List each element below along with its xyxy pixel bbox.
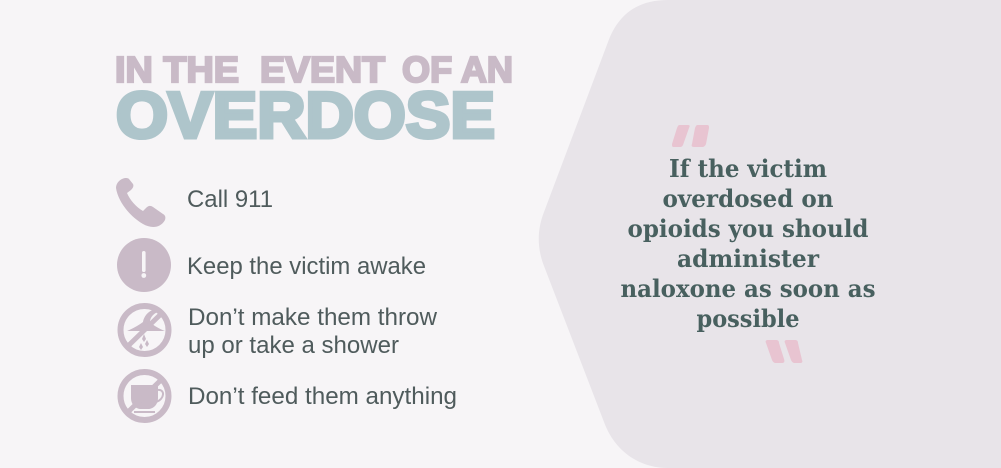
title [115,49,513,152]
heading: in the event of an: OF AN [402,49,513,90]
text block: quote: If the victim [669,154,827,183]
text block: quote: possible [696,304,800,333]
text block: steps: Don’t make them throw [188,304,438,331]
text block: steps [187,186,457,410]
text block: quote: opioids you should [628,214,869,243]
text block: quote [620,154,876,333]
text block: steps: Call 911 [187,186,273,213]
heading: in the event of an [115,49,513,90]
text block: quote: administer [677,244,819,273]
text block: quote: overdosed on [662,184,834,213]
heading: in the event of an: EVENT [260,49,385,90]
icon: no shower [120,306,168,354]
heading: overdose: OVERDOSE [116,78,495,152]
icon: phone [116,178,165,227]
text block: steps: Keep the victim awake [187,253,426,280]
icon: no food or drink [120,372,168,420]
icon: opening quote mark [672,125,709,147]
panel: quote background [539,0,1001,468]
icon: exclamation [117,238,171,292]
icon: closing quote mark [766,340,802,363]
text block: steps: up or take a shower [188,332,399,359]
text block: quote: naloxone as soon as [620,274,876,303]
heading: in the event of an: IN THE [115,49,239,90]
text block: steps: Don’t feed them anything [188,383,457,410]
